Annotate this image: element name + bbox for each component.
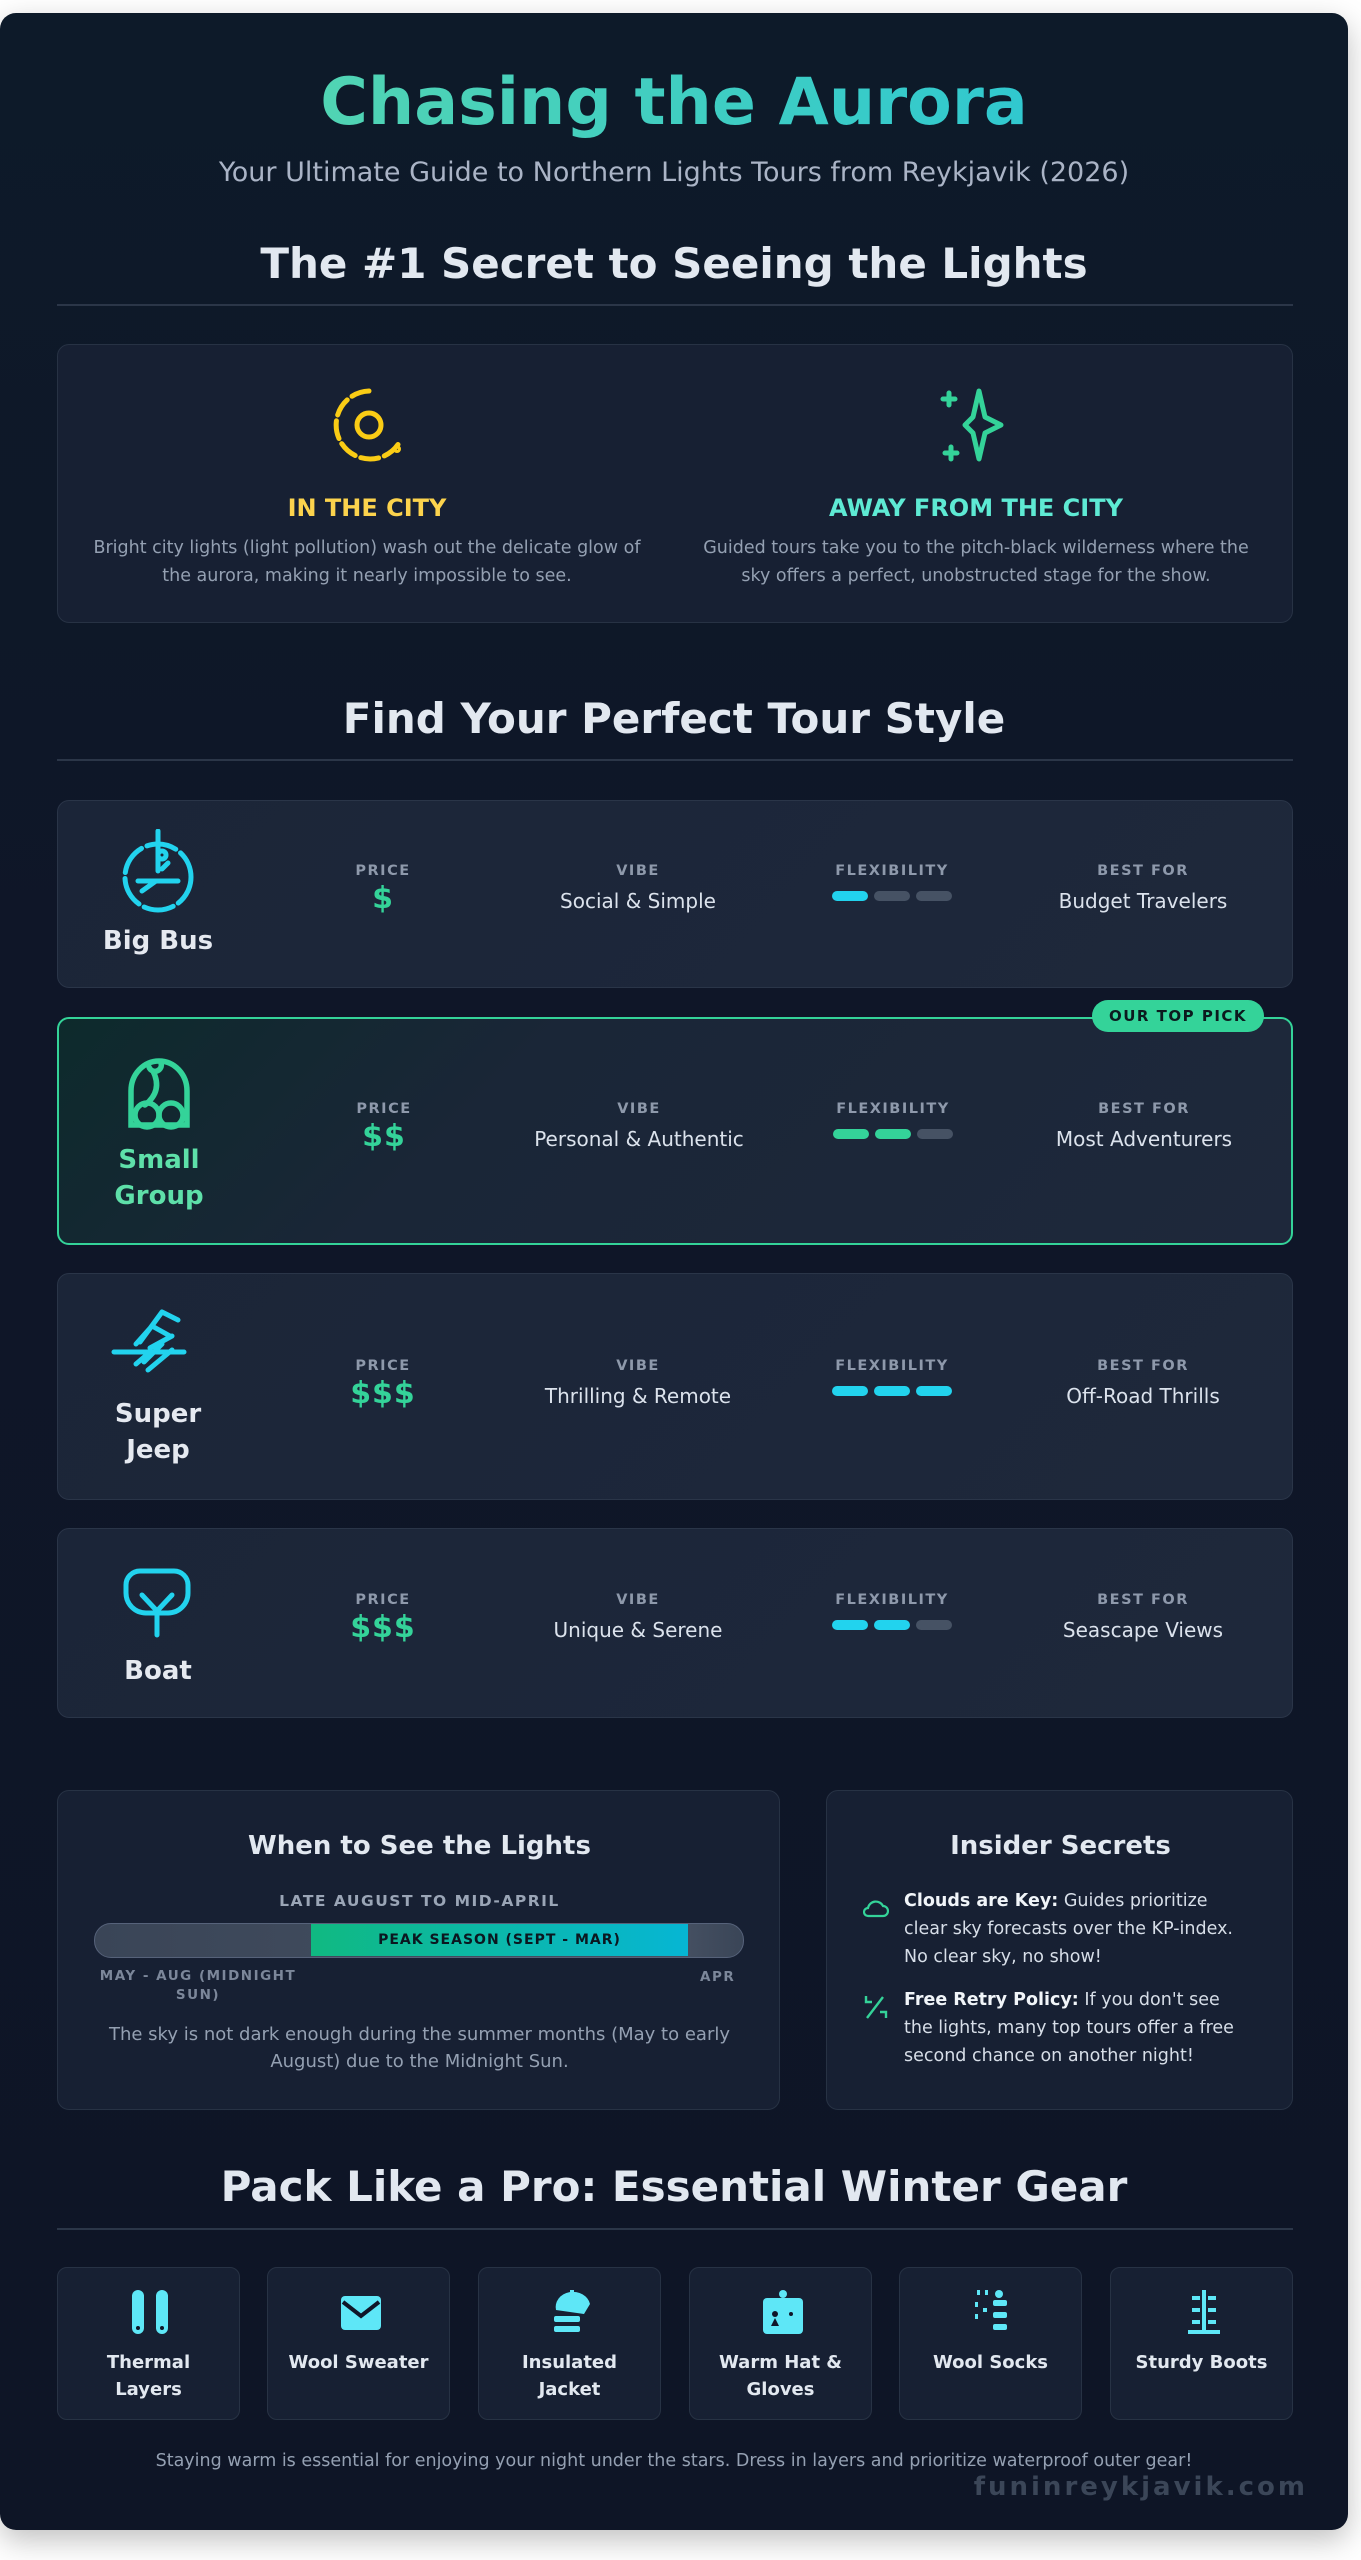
flexibility: FLEXIBILITY: [835, 1358, 949, 1374]
icon: city light: [334, 388, 401, 462]
best for: BEST FOR: [1097, 1592, 1189, 1608]
tip: retry: [864, 1990, 1234, 2066]
panel: when to see: [57, 1790, 780, 2110]
text: away: Guided tours take you to the pitch-black wilderness where the sky offers a perfect, unobstructed stage for the show.: [703, 538, 1249, 586]
flexibility: [833, 1101, 953, 1139]
icon: cloud: [863, 1900, 889, 1918]
tip: clouds: clear sky forecasts over the KP-index.: [904, 1919, 1233, 1939]
price: [355, 863, 411, 916]
tip: retry: Free Retry Policy: If you don't see: [904, 1990, 1220, 2010]
range label: LATE AUGUST TO MID-APRIL: [279, 1892, 560, 1910]
panel: secret: [57, 344, 1293, 623]
peak season: [311, 1924, 688, 1956]
name: Group: [114, 1181, 204, 1211]
icon: retry: [864, 1996, 888, 2019]
best for: [1056, 1101, 1232, 1151]
vibe: VIBE: [616, 1592, 660, 1608]
best for: BEST FOR: [1097, 1358, 1189, 1374]
best for: [1059, 863, 1227, 913]
footer text: Staying warm is essential for enjoying your night under the stars. Dress in layers and prioritize waterproof outer gear!: [156, 2451, 1192, 2471]
badge: top pick: OUR TOP PICK: [1109, 1007, 1247, 1025]
gear: sturdy boots: Sturdy Boots: [1136, 2352, 1267, 2373]
icon: sparkle: [940, 388, 1004, 462]
tip: retry: the lights, many top tours offer a free: [904, 2018, 1234, 2038]
row: small group: [57, 1017, 1293, 1245]
panel: insider secrets: [826, 1790, 1293, 2110]
flexibility: FLEXIBILITY: [835, 1592, 949, 1608]
price: PRICE: [355, 1592, 411, 1608]
gear: insulated jacket: Jacket: [539, 2379, 600, 2400]
price: $$$: [350, 1610, 416, 1645]
heading: away: AWAY FROM THE CITY: [829, 494, 1123, 522]
icon: boat: [124, 1568, 190, 1638]
heading: tour style: Find Your Perfect Tour Style: [343, 694, 1005, 743]
gear: wool socks: Wool Socks: [933, 2352, 1048, 2373]
price: $$: [362, 1119, 406, 1154]
gear: hat and gloves: Gloves: [747, 2379, 814, 2400]
watermark: funinreykjavik.com: [974, 2472, 1308, 2502]
gear: wool sweater: [267, 2267, 450, 2420]
tip: clouds: [863, 1891, 1233, 1967]
tip: retry: second chance on another night!: [904, 2046, 1194, 2066]
label: may-aug: SUN): [176, 1987, 220, 2003]
heading: secret: The #1 Secret to Seeing the Lights: [260, 239, 1088, 288]
heading: in the city: IN THE CITY: [288, 494, 446, 522]
flexibility: FLEXIBILITY: [835, 863, 949, 879]
gear: insulated jacket: [478, 2267, 661, 2420]
gear: hat and gloves: [689, 2267, 872, 2420]
best for: [1063, 1592, 1223, 1642]
price: $: [372, 881, 394, 916]
vibe: VIBE: [616, 863, 660, 879]
tip: clouds: Clouds are Key: Guides prioritize: [904, 1891, 1208, 1911]
gear: sturdy boots: [1110, 2267, 1293, 2420]
vibe: Personal & Authentic: [534, 1127, 744, 1151]
vibe: [554, 1592, 722, 1642]
flexibility: [832, 1358, 952, 1396]
price: [350, 1592, 416, 1645]
row: big bus: [57, 800, 1293, 988]
price: PRICE: [355, 863, 411, 879]
vibe: VIBE: [616, 1358, 660, 1374]
icon: jeep: [112, 1309, 186, 1372]
price: [356, 1101, 412, 1154]
flexibility: [832, 1592, 952, 1630]
name: [114, 1145, 204, 1211]
gear: insulated jacket: Insulated: [522, 2352, 617, 2373]
row: super jeep: [57, 1273, 1293, 1500]
heading: When to See the Lights: [248, 1831, 591, 1861]
vibe: VIBE: [617, 1101, 661, 1117]
flexibility: [832, 863, 952, 901]
name: Boat: [124, 1656, 192, 1686]
name: Small: [118, 1145, 200, 1175]
title: Chasing the Aurora: [320, 65, 1028, 140]
row: boat: [57, 1528, 1293, 1718]
vibe: Unique & Serene: [554, 1618, 722, 1642]
best for: Budget Travelers: [1059, 889, 1227, 913]
name: [115, 1399, 202, 1465]
text: in the city: Bright city lights (light pollution) wash out the delicate glow of the aurora, making it nearly impossible to see.: [93, 538, 640, 586]
tip: clouds: No clear sky, no show!: [904, 1947, 1102, 1967]
price: PRICE: [355, 1358, 411, 1374]
vibe: [544, 1358, 731, 1408]
heading: Insider Secrets: [950, 1831, 1171, 1861]
season bar: [94, 1923, 744, 1958]
name: Super: [115, 1399, 201, 1429]
gear: wool socks: [899, 2267, 1082, 2420]
best for: Seascape Views: [1063, 1618, 1223, 1642]
vibe: [534, 1101, 744, 1151]
vibe: Social & Simple: [560, 889, 716, 913]
badge: top pick: [1092, 1000, 1264, 1032]
gear: hat and gloves: Warm Hat &: [719, 2352, 842, 2373]
price: $$$: [350, 1376, 416, 1411]
name: Big Bus: [103, 926, 213, 956]
gear: wool sweater: Wool Sweater: [288, 2352, 429, 2373]
best for: [1066, 1358, 1220, 1408]
gear: thermal layers: Thermal: [107, 2352, 190, 2373]
label: may-aug: [100, 1968, 296, 2003]
icon: group: [128, 1058, 190, 1130]
name: Jeep: [126, 1435, 190, 1465]
price: PRICE: [356, 1101, 412, 1117]
subtitle: Your Ultimate Guide to Northern Lights Tours from Reykjavik (2026): [219, 157, 1129, 188]
peak season: PEAK SEASON (SEPT - MAR): [378, 1932, 621, 1948]
best for: BEST FOR: [1098, 1101, 1190, 1117]
gear: thermal layers: Layers: [115, 2379, 182, 2400]
label: apr: APR: [700, 1969, 735, 1985]
title: [0, 63, 1348, 143]
best for: Off-Road Thrills: [1066, 1384, 1220, 1408]
heading: pack: Pack Like a Pro: Essential Winter Gear: [221, 2162, 1127, 2211]
label: may-aug: MAY - AUG (MIDNIGHT: [100, 1968, 296, 1984]
vibe: [560, 863, 716, 913]
vibe: Thrilling & Remote: [545, 1384, 731, 1408]
price: [350, 1358, 416, 1411]
gear: thermal layers: [57, 2267, 240, 2420]
icon: bus: [122, 829, 194, 912]
description: The sky is not dark enough during the summer months (May to early August) due to the Midnight Sun.: [109, 2024, 730, 2072]
best for: Most Adventurers: [1056, 1127, 1232, 1151]
flexibility: FLEXIBILITY: [836, 1101, 950, 1117]
best for: BEST FOR: [1097, 863, 1189, 879]
